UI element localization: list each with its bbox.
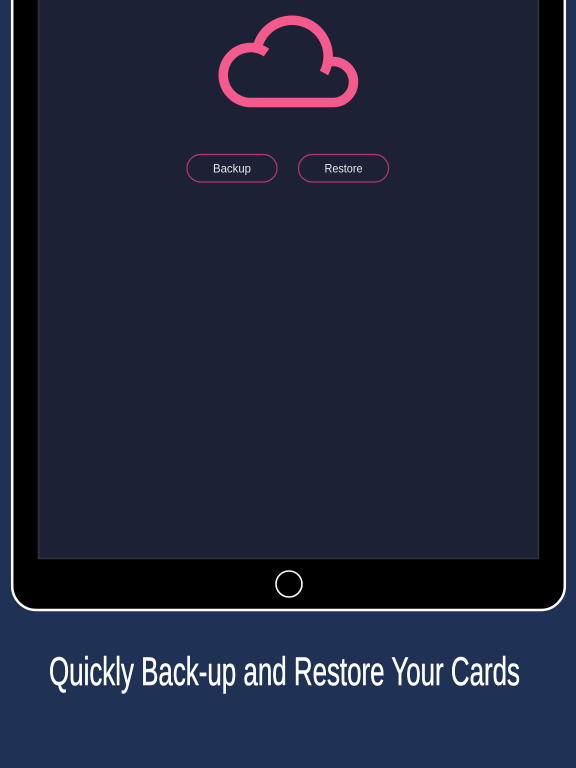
button: restore: Restore [324,162,363,176]
button: restore [298,154,388,182]
tablet device frame [12,0,565,610]
icon: cloud [223,20,354,103]
tablet screen [38,0,538,558]
button: backup [187,154,277,182]
home button [276,571,302,597]
button: backup: Backup [213,162,251,176]
